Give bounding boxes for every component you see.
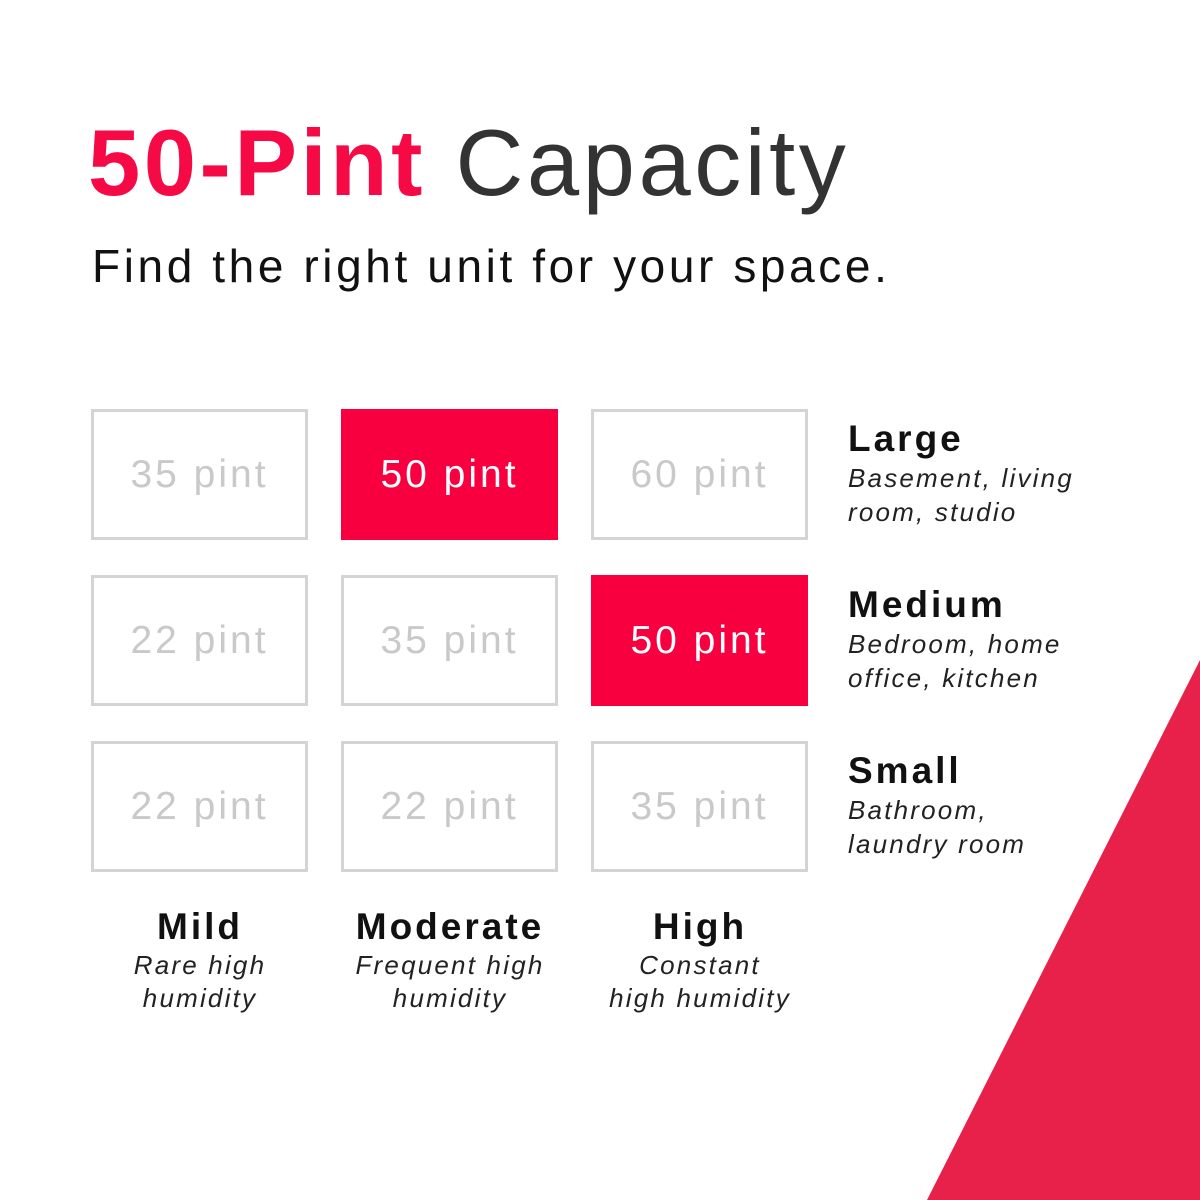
column label: high: Constant — [639, 950, 761, 980]
row label: small: Bathroom, — [848, 795, 988, 825]
row label: small: laundry room — [848, 829, 1026, 859]
column label: moderate: humidity — [393, 983, 507, 1013]
row label: medium — [848, 584, 1062, 693]
row label: large: Large — [848, 418, 964, 459]
row label: large — [848, 418, 1074, 527]
column label: high: High — [653, 906, 747, 947]
grid of capacity boxes: 35 pint — [630, 784, 769, 828]
grid of capacity boxes: 22 pint — [130, 784, 269, 828]
grid of capacity boxes: 22 pint — [130, 618, 269, 662]
row label: small — [848, 750, 1026, 859]
column label: mild: humidity — [143, 983, 257, 1013]
row label: small: Small — [848, 750, 962, 791]
grid of capacity boxes: 50 pint — [630, 618, 769, 662]
column label: high: high humidity — [609, 983, 791, 1013]
column label: high — [609, 906, 791, 1013]
grid of capacity boxes: 22 pint — [380, 784, 519, 828]
column label: mild: Mild — [157, 906, 243, 947]
grid of capacity boxes: 35 pint — [130, 452, 269, 496]
column label: moderate: Frequent high — [355, 950, 545, 980]
subtitle: Find the right unit for your space. — [92, 240, 890, 292]
column label: moderate: Moderate — [356, 906, 544, 947]
column label: mild: Rare high — [134, 950, 266, 980]
row label: medium: Bedroom, home — [848, 629, 1062, 659]
column label: moderate — [355, 906, 545, 1013]
grid of capacity boxes: 35 pint — [380, 618, 519, 662]
row label: large: room, studio — [848, 497, 1017, 527]
grid of capacity boxes: 60 pint — [630, 452, 769, 496]
grid of capacity boxes: 50 pint — [380, 452, 519, 496]
title: 50-Pint Capacity — [88, 110, 849, 215]
column label: mild — [134, 906, 266, 1013]
row label: large: Basement, living — [848, 463, 1074, 493]
grid of capacity boxes — [91, 409, 808, 872]
row label: medium: office, kitchen — [848, 663, 1040, 693]
row label: medium: Medium — [848, 584, 1006, 625]
